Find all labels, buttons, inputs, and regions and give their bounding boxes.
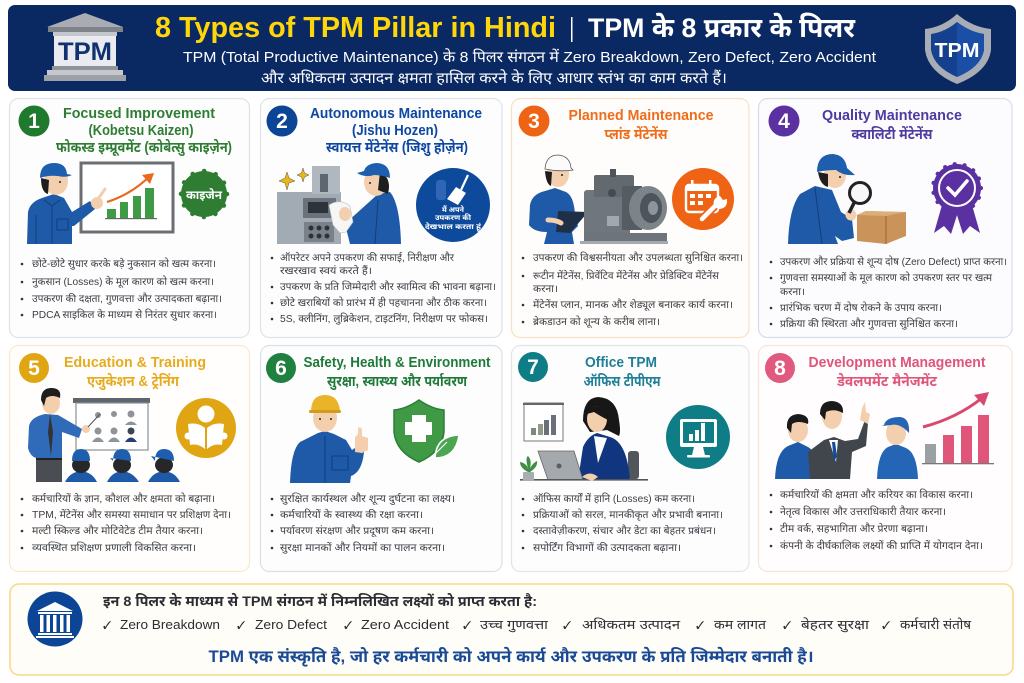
heading: Development Management [808, 355, 986, 371]
bullet list: सुरक्षित कार्यस्थल और शून्य दुर्घटना का लक्ष्य। [280, 493, 455, 505]
heading [56, 106, 232, 157]
panel 7: Office TPM [512, 346, 749, 572]
bullet list: नुकसान (Losses) के मूल कारण को खत्म करना। [32, 276, 214, 288]
panel 1: Focused Improvement [10, 98, 250, 338]
number badge 8 [765, 353, 795, 383]
bullet list [770, 256, 1007, 330]
heading: Office TPM [585, 355, 657, 371]
bullet list: TPM, मेंटेनेंस और समस्या समाधान पर प्रशिक्षण देना। [32, 509, 231, 521]
bullet list [271, 493, 455, 554]
goal checklist: कर्मचारी संतोष [900, 617, 971, 632]
bullet list: मल्टी स्किल्ड और मोटिवेटेड टीम तैयार करना। [32, 525, 203, 537]
bullet list: सुरक्षा मानकों और नियमों का पालन करना। [280, 542, 445, 554]
icon: Kaizen badge: काइजेन [186, 187, 223, 202]
panel 2: Autonomous Maintenance [260, 98, 502, 338]
number badge 6: 6 [275, 357, 287, 380]
number badge 2: 2 [276, 110, 288, 133]
icon: broom pledge badge: मैं अपने [442, 205, 464, 214]
icon: TPM pillar: TPM [58, 38, 112, 66]
bullet list: रखरखाव स्वयं करते हैं। [280, 265, 372, 277]
bullet list: पर्यावरण संरक्षण और प्रदूषण कम करना। [280, 525, 434, 537]
heading: ऑफिस टीपीएम [584, 373, 661, 390]
goal checklist: ✓ [463, 620, 471, 632]
bullet list: ऑफिस कार्यों में हानि (Losses) कम करना। [533, 493, 695, 505]
heading [568, 108, 714, 143]
panel: summary footer [10, 584, 1013, 675]
goal checklist: Zero Defect [255, 617, 327, 632]
bullet list: नेतृत्व विकास और उत्तराधिकारी तैयार करना। [780, 506, 946, 518]
goal checklist: ✓ [237, 620, 245, 632]
goal checklist: ✓ [882, 620, 890, 632]
panel 5: Education & Training [10, 346, 250, 572]
heading: डेवलपमेंट मैनेजमेंट [836, 372, 937, 390]
bullet list [522, 493, 723, 554]
bullet list: कर्मचारियों की क्षमता और करियर का विकास करना। [780, 489, 973, 501]
heading [808, 355, 986, 390]
heading [64, 355, 206, 391]
illustration: worker pointing at growth chart [27, 163, 173, 244]
bullet list: छोटे खराबियों को प्रारंभ में ही पहचानना और ठीक करना। [280, 297, 487, 309]
bullet list: 5S, क्लीनिंग, लुब्रिकेशन, टाइटनिंग, निरीक्षण पर फोकस। [280, 313, 488, 325]
bullet list: ब्रेकडाउन को शून्य के करीब लाना। [533, 316, 660, 328]
illustration: trainer and audience [28, 388, 180, 482]
icon: TPM shield [925, 14, 991, 84]
bullet list: रूटीन मेंटेनेंस, प्रिवेंटिव मेंटेनेंस और प्रेडिक्टिव मेंटेनेंस [533, 270, 719, 282]
bullet list [522, 252, 743, 328]
header banner [8, 5, 1016, 91]
panel 6: Safety, Health & Environment [260, 346, 502, 572]
heading: Focused Improvement [63, 106, 215, 122]
icon: health shield with leaf [394, 400, 459, 463]
panel 8: Development Management [758, 346, 1012, 572]
number badge 3: 3 [528, 110, 540, 133]
illustration: worker cleaning machine [277, 163, 401, 244]
icon: institution [28, 592, 82, 646]
goal checklist: अधिकतम उत्पादन [582, 617, 681, 632]
heading: (Jishu Hozen) [352, 123, 438, 139]
heading: Autonomous Maintenance [310, 106, 482, 122]
bullet list: करना। [533, 284, 558, 295]
number badge 2 [266, 106, 298, 136]
bullet list: टीम वर्क, सहभागिता और प्रेरणा बढ़ाना। [780, 523, 928, 535]
panel 4: Quality Maintenance [758, 98, 1012, 338]
subtitle: TPM (Total Productive Maintenance) के 8 पिलर संगठन में Zero Breakdown, Zero Defect, Zero Accident [183, 48, 877, 66]
bullet list: उपकरण की विश्वसनीयता और उपलब्धता सुनिश्चित करना। [533, 252, 743, 264]
bullet list [21, 493, 231, 554]
goal checklist [103, 617, 971, 633]
number badge 3 [518, 106, 550, 136]
tagline: TPM एक संस्कृति है, जो हर कर्मचारी को अपने कार्य और उपकरण के प्रति जिम्मेदार बनाती है। [208, 647, 814, 667]
heading [822, 108, 962, 143]
icon: broom pledge badge: देखभाल करता हूं [425, 221, 482, 232]
icon: TPM pillar [44, 13, 126, 81]
goal checklist: ✓ [103, 620, 111, 632]
bullet list: करना। [780, 287, 805, 298]
icon: reader [176, 398, 236, 458]
goal checklist: Zero Accident [361, 617, 449, 632]
illustration: worker with thumbs up [290, 395, 368, 483]
icon: calendar and wrench [672, 168, 734, 230]
heading [310, 106, 482, 157]
goal checklist: कम लागत [714, 617, 767, 632]
bullet list: कर्मचारियों के ज्ञान, कौशल और क्षमता को बढ़ाना। [32, 493, 215, 505]
bullet list: मेंटेनेंस प्लान, मानक और शेड्यूल बनाकर कार्य करना। [533, 299, 733, 311]
number badge 5 [19, 353, 49, 383]
heading: Quality Maintenance [822, 108, 962, 124]
illustration: manager and team [775, 392, 994, 479]
bullet list: ऑपरेटर अपने उपकरण की सफाई, निरीक्षण और [280, 252, 455, 264]
icon: monitor with chart [666, 405, 730, 469]
bullet list [271, 252, 496, 325]
goal checklist: बेहतर सुरक्षा [801, 617, 870, 633]
bullet list: सपोर्टिंग विभागों की उत्पादकता बढ़ाना। [533, 542, 681, 554]
number badge 4: 4 [778, 110, 790, 133]
goal checklist: ✓ [344, 620, 352, 632]
icon: quality rosette [933, 164, 981, 234]
number badge 5: 5 [28, 357, 40, 380]
heading: Planned Maintenance [568, 108, 714, 124]
heading: एजुकेशन & ट्रेनिंग [87, 372, 180, 391]
number badge 4 [768, 106, 800, 136]
heading [304, 355, 491, 391]
bullet list [21, 258, 222, 321]
bullet list: उपकरण और प्रक्रिया से शून्य दोष (Zero Defect) प्राप्त करना। [780, 256, 1007, 268]
bullet list: कर्मचारियों के स्वास्थ्य की रक्षा करना। [280, 509, 423, 521]
icon: Kaizen badge [181, 171, 227, 217]
illustration: worker with clipboard and motor [529, 155, 668, 244]
heading: स्वायत्त मेंटेनेंस (जिशु होज़ेन) [326, 138, 468, 157]
heading: (Kobetsu Kaizen) [88, 123, 194, 139]
panel 3: Planned Maintenance [512, 98, 749, 338]
subtitle: और अधिकतम उत्पादन क्षमता हासिल करने के लिए आधार स्तंभ का काम करते हैं। [261, 69, 727, 87]
bullet list [770, 489, 983, 552]
goal checklist: Zero Breakdown [120, 617, 220, 632]
bullet list: उपकरण के प्रति जिम्मेदारी और स्वामित्व की भावना बढ़ाना। [280, 281, 496, 293]
bullet list: प्रारंभिक चरण में दोष रोकने के उपाय करना। [780, 302, 942, 314]
heading [584, 355, 661, 390]
summary heading: इन 8 पिलर के माध्यम से TPM संगठन में निम्नलिखित लक्ष्यों को प्राप्त करता है: [103, 592, 537, 609]
bullet list: कंपनी के दीर्घकालिक लक्ष्यों की प्राप्ति में योगदान देना। [780, 540, 983, 552]
heading: क्वालिटी मेंटेनेंस [852, 125, 933, 143]
bullet list: प्रक्रिया की स्थिरता और गुणवत्ता सुनिश्चित करना। [780, 318, 958, 330]
goal checklist: ✓ [783, 620, 791, 632]
heading: प्लांड मेंटेनेंस [604, 125, 668, 143]
bullet list: गुणवत्ता समस्याओं के मूल कारण को उपकरण स्तर पर खत्म [780, 272, 993, 284]
icon: TPM shield: TPM [934, 40, 980, 62]
bullet list: प्रक्रियाओं को सरल, मानकीकृत और प्रभावी बनाना। [533, 509, 723, 521]
heading: फोकस्ड इम्प्रूवमेंट (कोबेत्सु काइज़ेन) [56, 138, 232, 157]
heading: Education & Training [64, 355, 206, 371]
bullet list: दस्तावेज़ीकरण, संचार और डेटा का बेहतर प्रबंधन। [533, 525, 716, 537]
heading: सुरक्षा, स्वास्थ्य और पर्यावरण [327, 373, 467, 391]
goal checklist: ✓ [696, 620, 704, 632]
illustration: worker inspecting box [788, 154, 906, 244]
number badge 1 [18, 106, 50, 136]
goal checklist: उच्च गुणवत्ता [480, 617, 549, 633]
icon: broom pledge badge [416, 168, 490, 242]
bullet list: उपकरण की दक्षता, गुणवत्ता और उत्पादकता बढ़ाना। [32, 293, 222, 305]
subtitle [183, 48, 877, 87]
title english: 8 Types of TPM Pillar in Hindi [155, 12, 556, 44]
goal checklist: ✓ [563, 620, 571, 632]
number badge 7 [518, 352, 548, 382]
number badge 6 [266, 353, 296, 383]
bullet list: व्यवस्थित प्रशिक्षण प्रणाली विकसित करना। [32, 542, 196, 554]
number badge 7: 7 [527, 356, 539, 379]
heading: Safety, Health & Environment [304, 355, 491, 371]
number badge 1: 1 [28, 110, 40, 133]
illustration: woman at laptop [520, 397, 648, 481]
icon: broom pledge badge: उपकरण की [435, 213, 472, 222]
title hindi: TPM के 8 प्रकार के पिलर [588, 12, 856, 43]
bullet list: छोटे-छोटे सुधार करके बड़े नुकसान को खत्म करना। [32, 258, 216, 270]
bullet list: PDCA साइकिल के माध्यम से निरंतर सुधार करना। [32, 309, 217, 321]
number badge 8: 8 [774, 357, 786, 380]
